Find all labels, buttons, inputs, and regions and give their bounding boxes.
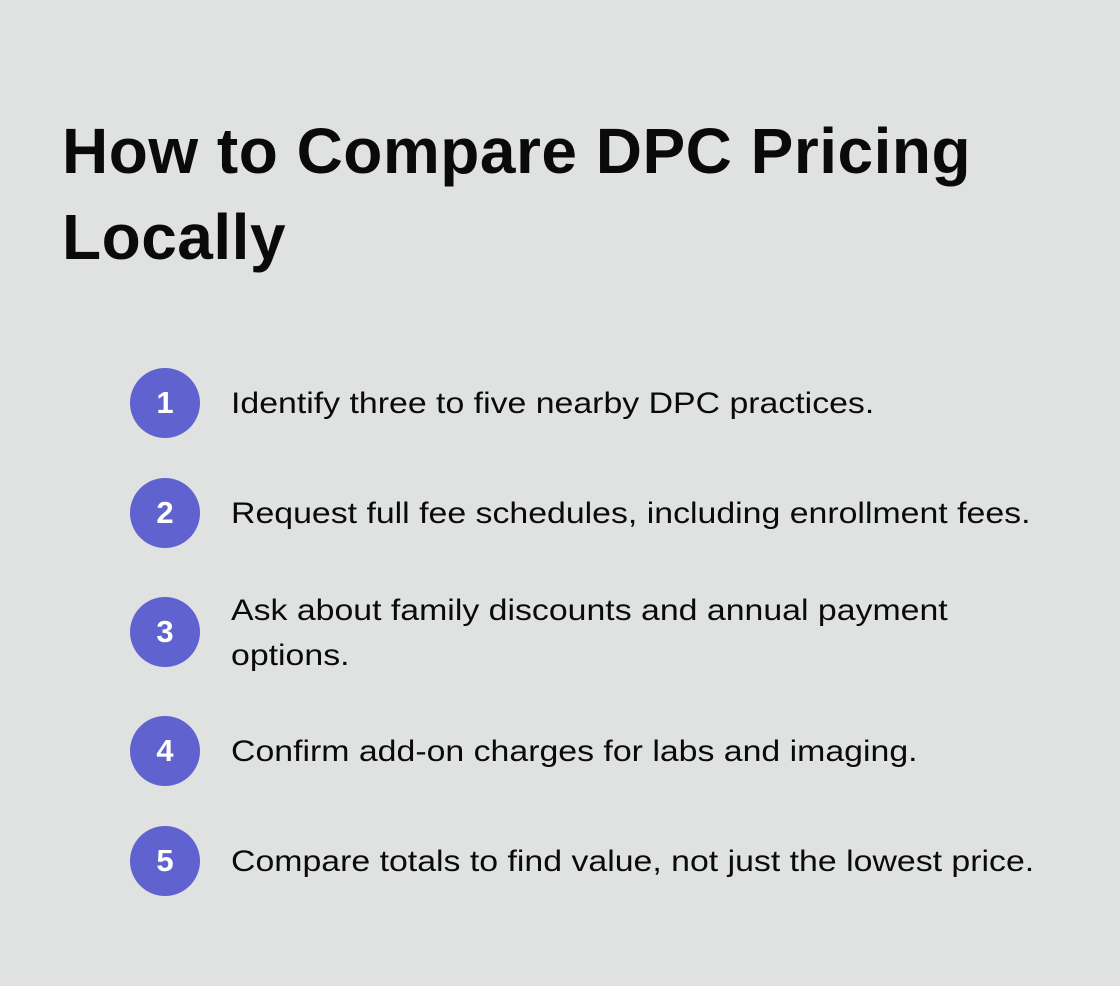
step 1	[130, 368, 874, 438]
step 3: Ask about family discounts and annual payment	[231, 594, 948, 627]
step 1: 1	[156, 385, 174, 420]
step 2: 2	[156, 495, 174, 530]
title	[62, 115, 971, 273]
step 2: Request full fee schedules, including enrollment fees.	[231, 497, 1030, 530]
step 3	[130, 594, 948, 672]
step 1: Identify three to five nearby DPC practices.	[231, 387, 874, 420]
step 4: 4	[156, 733, 174, 768]
step 5: 5	[156, 843, 174, 878]
step 2	[130, 478, 1030, 548]
title: How to Compare DPC Pricing	[62, 115, 971, 187]
step 3: 3	[156, 614, 174, 649]
title: Locally	[62, 201, 286, 273]
step 4	[130, 716, 918, 786]
step 5	[130, 826, 1034, 896]
step 4: Confirm add-on charges for labs and imaging.	[231, 735, 918, 768]
step 5: Compare totals to find value, not just the lowest price.	[231, 845, 1034, 878]
step 3: options.	[231, 639, 350, 672]
